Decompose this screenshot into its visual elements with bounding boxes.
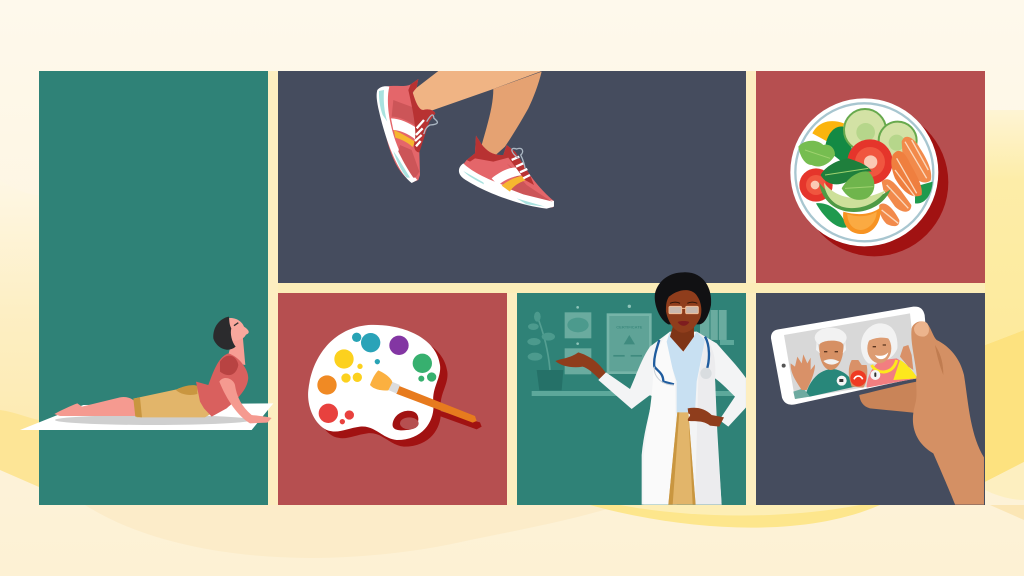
illustration: running legs and sneakers [377,71,554,209]
sneaker 2 [459,136,554,209]
left hand [555,352,606,379]
brush bristles [370,370,392,390]
half cucumber [819,183,891,212]
cucumber slices [844,109,886,151]
panel: yoga [39,71,268,505]
illustration: video call on phone [771,307,984,508]
lettuce leaves [798,141,835,167]
legs [54,397,137,416]
phone [771,307,930,405]
tomato slices [847,139,893,185]
stethoscope [654,337,709,384]
lower leg 1 [412,71,542,113]
salmon pieces [902,137,931,182]
brush shadow [435,410,482,429]
chest skin and neck [228,335,245,365]
background office [527,305,735,396]
hand [911,321,984,508]
orange half [843,207,881,234]
plate [790,98,938,246]
hair [655,272,711,324]
head [227,318,249,341]
face [666,290,701,333]
eyebrows [670,302,697,303]
palette shadow [315,332,448,447]
palette [308,325,440,440]
panel: video call [756,293,985,505]
phone screen [784,313,917,399]
plate shadow [800,108,948,256]
yoga mat [20,403,273,430]
paint blobs [352,333,361,342]
thumb hole [393,411,418,430]
illustration: paint palette [308,325,482,447]
older woman [849,323,917,388]
call buttons [837,376,847,386]
fingers behind phone [859,382,920,413]
older man [791,328,855,399]
camera dot [782,364,786,368]
panel: healthy plate [756,71,985,283]
dark leaves [825,126,855,162]
shirt [196,353,248,417]
illustration: doctor [527,272,748,505]
right hand [688,408,724,427]
brush handle [396,386,477,423]
panel: painting [278,293,507,505]
panel: doctor [517,293,746,505]
brush ferrule [388,382,400,394]
sneaker 1 [377,79,437,183]
illustration: salad plate [790,98,948,256]
arm [219,378,272,423]
glasses [669,306,698,314]
coat [598,332,748,505]
skirt [668,412,696,505]
neck [670,325,694,352]
illustration: woman in cobra yoga pose [20,317,273,430]
lips [678,321,689,326]
background office: CERTIFICATE [616,324,643,329]
thumb nail [914,321,929,337]
lower leg 2 [482,72,542,156]
shorts [133,386,212,417]
hair [213,317,236,350]
orange slice [812,121,844,147]
panel: running shoes [278,71,746,283]
